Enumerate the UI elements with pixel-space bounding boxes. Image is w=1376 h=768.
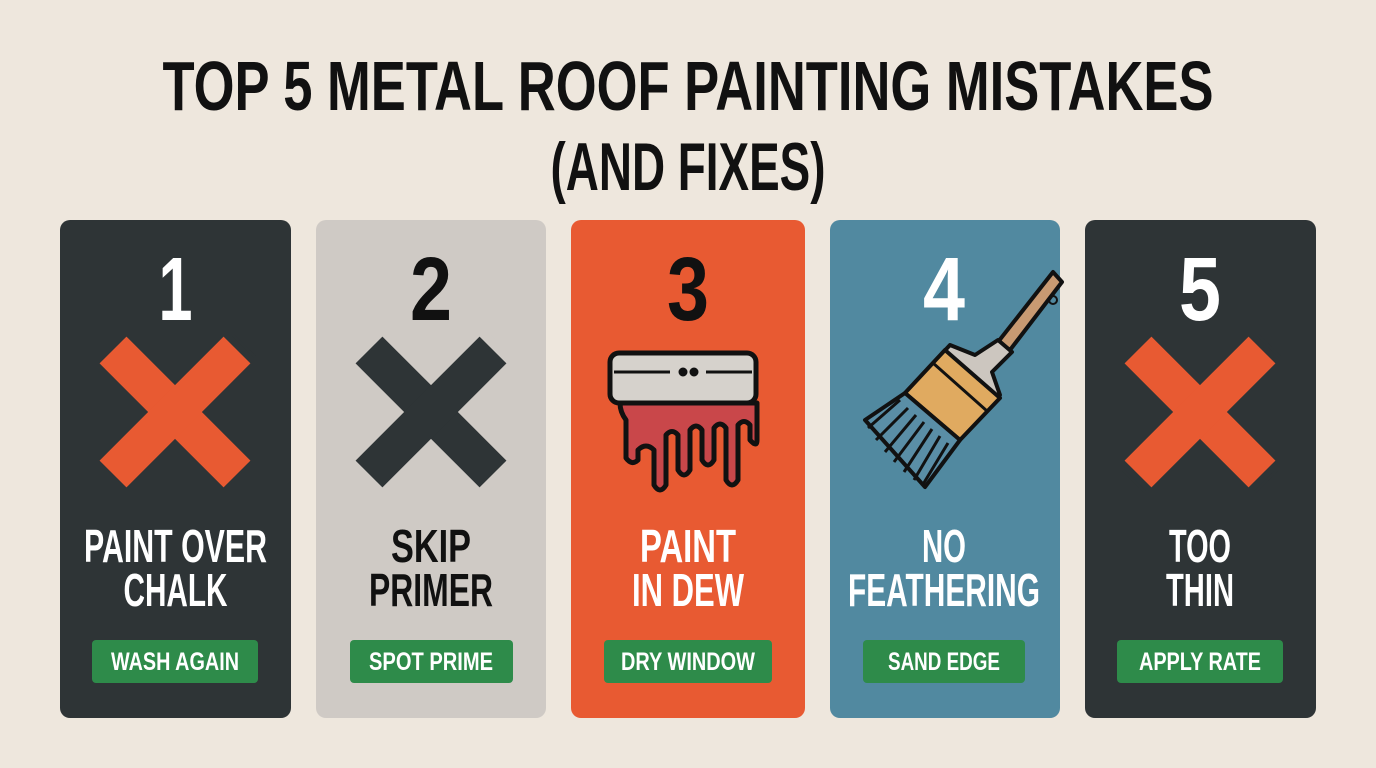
button: sand edge: SAND EDGE: [888, 648, 1000, 676]
button: spot prime: SPOT PRIME: [369, 648, 493, 676]
panel: 4 no feathering: FEATHERING: [848, 564, 1040, 616]
button: apply rate: APPLY RATE: [1139, 648, 1261, 676]
icon: dark X: [351, 335, 511, 492]
button: wash again: WASH AGAIN: [111, 648, 239, 676]
panel: 2 skip primer: PRIMER: [369, 564, 493, 616]
panel: 4 no feathering: [830, 220, 1062, 718]
button: sand edge: [863, 640, 1025, 683]
title: (AND FIXES): [550, 129, 826, 205]
panel: 3 paint in dew: 3: [667, 240, 709, 340]
icon: dripping paint roller: [610, 353, 757, 490]
button: wash again: [92, 640, 258, 683]
panel: 3 paint in dew: [571, 220, 805, 718]
button: spot prime: [350, 640, 513, 683]
title: [162, 47, 1214, 205]
icon: orange X: [1120, 335, 1280, 492]
button: apply rate: [1117, 640, 1283, 683]
panel: 3 paint in dew: IN DEW: [632, 564, 744, 616]
panel: 2 skip primer: 2: [410, 240, 452, 340]
panel: 1 paint over chalk: PAINT OVER: [84, 520, 267, 572]
panel: 1 paint over chalk: 1: [158, 240, 192, 340]
icon: paint brush: [865, 272, 1062, 487]
panel: 5 too thin: TOO: [1169, 520, 1231, 572]
panel: 3 paint in dew: PAINT: [640, 520, 736, 572]
icon: orange X: [95, 335, 255, 492]
panel: 1 paint over chalk: [60, 220, 291, 718]
button: dry window: DRY WINDOW: [621, 648, 755, 676]
panel: 5 too thin: 5: [1179, 240, 1221, 340]
panel: 1 paint over chalk: CHALK: [124, 564, 228, 616]
panel: 4 no feathering: NO: [922, 520, 966, 572]
panel: 4 no feathering: 4: [923, 240, 965, 340]
panel: 2 skip primer: SKIP: [391, 520, 471, 572]
panel: 5 too thin: THIN: [1166, 564, 1234, 616]
panel: 2 skip primer: [316, 220, 546, 718]
panel: 5 too thin: [1085, 220, 1316, 718]
button: dry window: [604, 640, 772, 683]
